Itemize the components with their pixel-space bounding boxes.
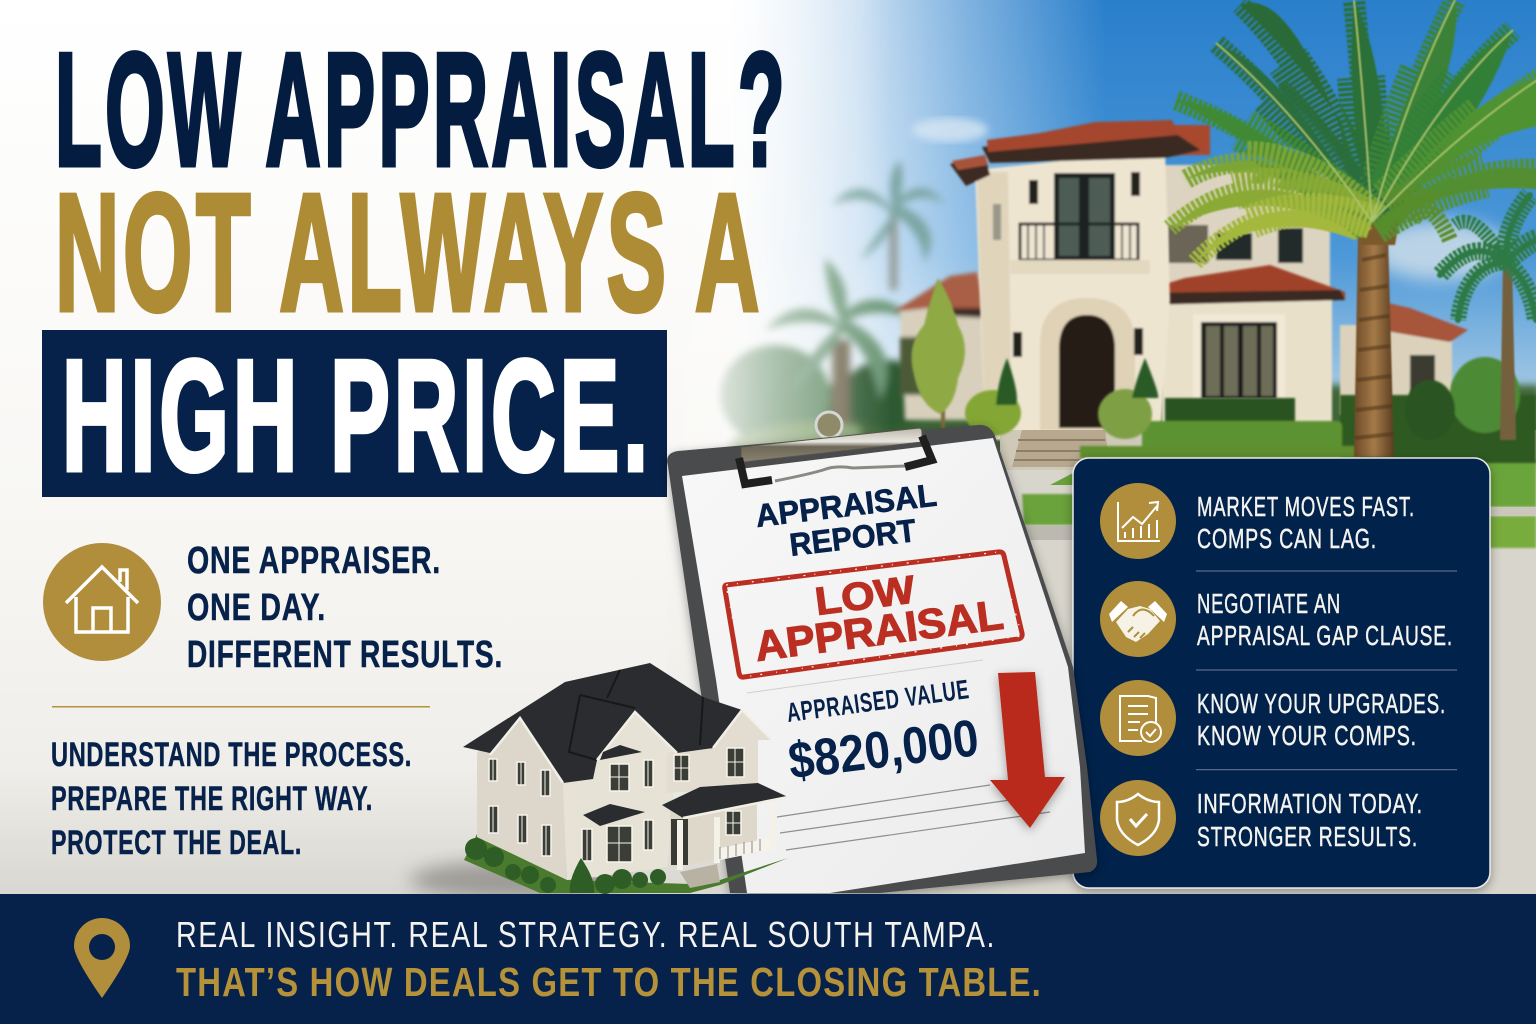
headline banner: high price: HIGH PRICE. <box>62 328 652 504</box>
text: one appraiser block <box>187 540 503 676</box>
appraised value label: APPRAISED VALUE <box>785 674 971 728</box>
headline banner: high price <box>42 328 667 504</box>
appraised value amount: $820,000 <box>785 709 982 791</box>
text: understand the process block <box>51 736 412 862</box>
clipboard with appraisal report <box>667 412 1097 893</box>
stamp: low appraisal <box>725 552 1022 677</box>
text: understand the process block: PREPARE THE RIGHT WAY. <box>51 780 373 818</box>
paper sheet <box>682 438 1085 893</box>
metal clip <box>739 428 932 484</box>
house far right wing <box>1340 300 1468 415</box>
headline: NOT ALWAYS A <box>55 160 763 346</box>
clipboard board <box>667 425 1097 893</box>
stamp: low appraisal: APPRAISAL <box>752 591 1006 670</box>
tip 3: know your upgrades <box>1100 680 1446 756</box>
tip 1: market moves fast <box>1100 483 1415 559</box>
tip 1: market moves fast: COMPS CAN LAG. <box>1197 523 1377 554</box>
bottom banner <box>0 894 1536 1024</box>
tip 1: market moves fast: MARKET MOVES FAST. <box>1197 491 1415 522</box>
tip 4: information today: STRONGER RESULTS. <box>1197 821 1418 852</box>
clip ring <box>816 412 842 438</box>
report title: REPORT <box>788 512 918 563</box>
tip 4: information today: INFORMATION TODAY. <box>1197 788 1423 819</box>
left wall <box>477 718 567 880</box>
house left wing <box>893 272 990 420</box>
lawn, steps and pavement <box>640 430 1536 900</box>
porch <box>671 819 688 865</box>
text: understand the process block: UNDERSTAND THE PROCESS. <box>51 736 412 774</box>
porch roof <box>662 783 788 818</box>
tip 3: know your upgrades: KNOW YOUR COMPS. <box>1197 720 1417 751</box>
3D model house <box>410 663 788 900</box>
tip 2: negotiate gap clause <box>1100 581 1453 657</box>
garden shrubs and hedge <box>912 278 1536 463</box>
tip 2: negotiate gap clause: NEGOTIATE AN <box>1197 588 1341 619</box>
frond cores <box>1240 3 1372 225</box>
left white fade over photo <box>0 0 882 894</box>
report title <box>754 477 939 563</box>
stamp: low appraisal: LOW <box>813 569 918 624</box>
closing line: THAT’S HOW DEALS GET TO THE CLOSING TABLE. <box>176 959 1042 1005</box>
main palm tree <box>1170 0 1536 457</box>
house right wing with red roof <box>1143 265 1345 436</box>
icon: location pin <box>74 918 130 998</box>
right wall <box>667 710 772 793</box>
text: one appraiser block: ONE DAY. <box>187 587 326 629</box>
background trees <box>720 160 1536 470</box>
windows <box>489 748 744 862</box>
red down arrow <box>990 672 1065 828</box>
roof <box>463 663 772 783</box>
icon: house badge <box>43 543 161 661</box>
house upper right section <box>1160 125 1330 290</box>
text: understand the process block: PROTECT THE DEAL. <box>51 824 302 862</box>
right small palm <box>1440 195 1536 440</box>
text: one appraiser block: DIFFERENT RESULTS. <box>187 634 503 676</box>
headline <box>55 20 788 346</box>
shrubs <box>465 838 666 894</box>
tagline: REAL INSIGHT. REAL STRATEGY. REAL SOUTH TAMPA. <box>176 914 996 955</box>
panel: key tips <box>1073 458 1490 888</box>
text: one appraiser block: ONE APPRAISER. <box>187 540 441 582</box>
front wall <box>563 712 677 880</box>
tip 4: information today <box>1100 780 1423 856</box>
report title: APPRAISAL <box>754 477 939 534</box>
house central tower <box>950 120 1200 440</box>
